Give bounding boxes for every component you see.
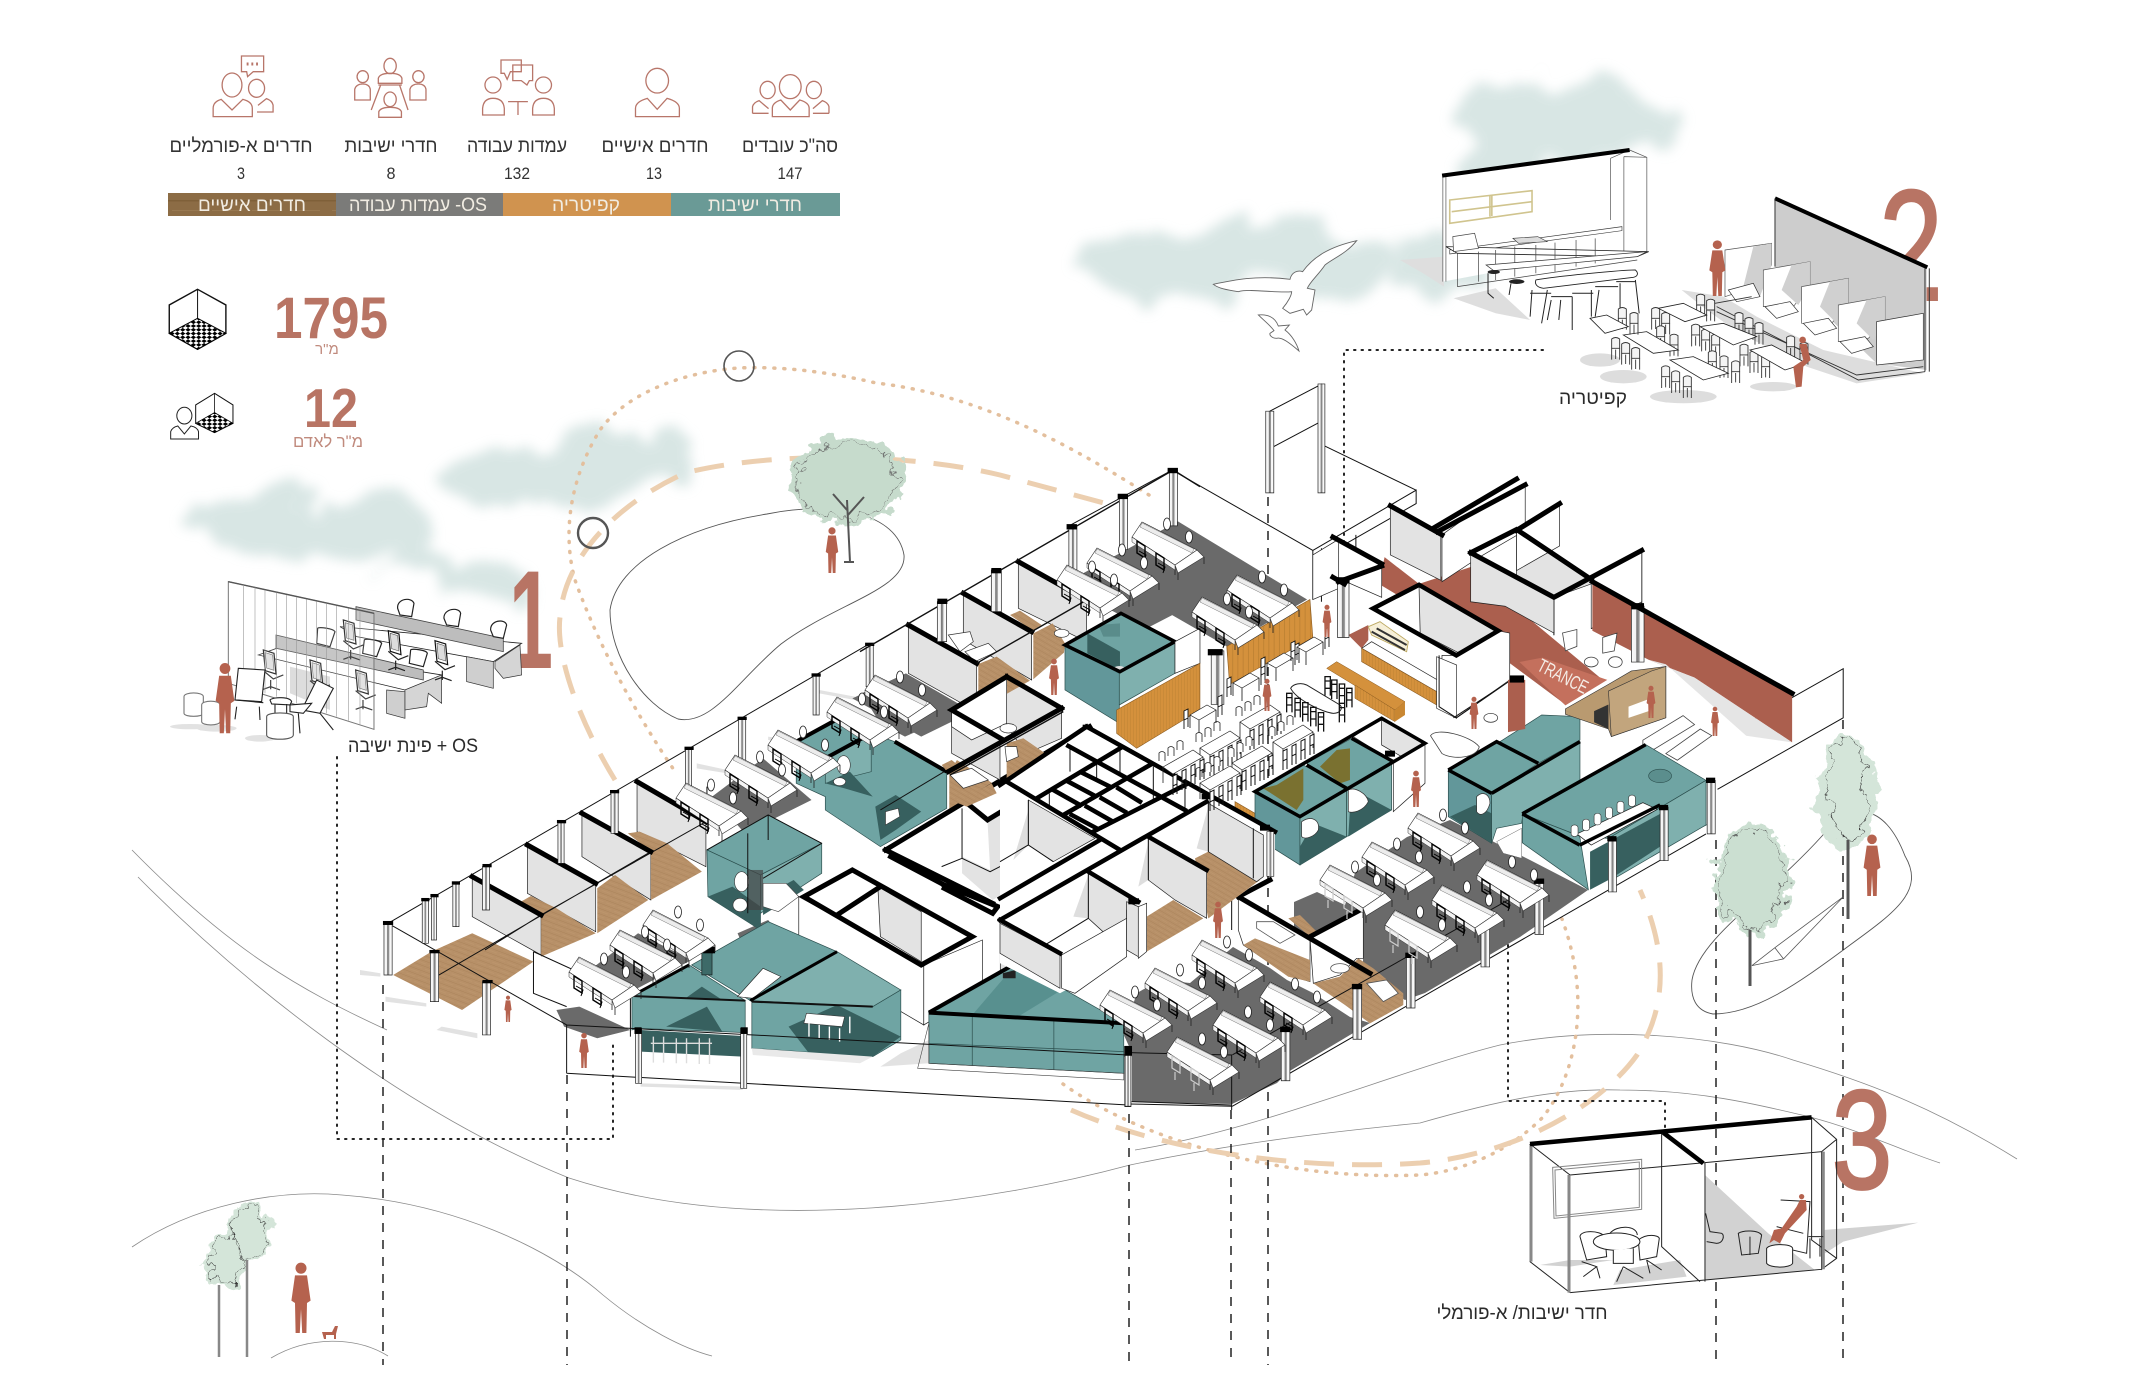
people in the plan [504,605,1719,1068]
detail view 2: kitchen part [1400,150,1649,330]
big gull [1213,241,1357,315]
ground contour lines [132,850,2017,1358]
front left meeting rooms [632,922,901,1064]
central teal booths [1255,718,1425,865]
label informal rooms: חדרים א-פורמליים [170,136,312,157]
person in park [826,527,838,573]
thin line frame [1130,897,1232,1110]
white room walls [1238,898,1363,983]
private rooms and meeting box: upper middle [860,470,1200,807]
segment: meeting rooms [671,193,840,216]
facade post caps [937,568,1001,604]
column caps [383,643,1131,1057]
acoustic orange wall [1117,663,1200,748]
segment: cafeteria [503,193,671,216]
tall tree right [1817,736,1877,919]
office chairs [263,620,455,710]
core column caps [1083,725,1270,904]
statistics labels [170,136,838,183]
round table and chairs [1580,1227,1662,1282]
icon: employees group [753,75,829,117]
area icon: room with checker floor [169,289,226,349]
wood floors private rooms [393,760,993,1010]
label total employees: סה"כ עובדים [742,136,838,157]
core wood floors [1147,852,1260,952]
facade columns [384,645,1131,1107]
icon: workstation [483,60,554,115]
upper room walls [1313,483,1642,633]
core front white walls [1062,918,1127,993]
white return wall [1175,628,1200,673]
lower right rooms [1130,880,1403,1110]
detail view 1: open space [170,582,522,742]
stat: area unit: מ"ר [315,341,339,358]
landscape blob: right garden [1692,812,1912,1014]
core thin verticals [1000,748,1253,945]
label private rooms count: חדרים אישיים [602,136,708,157]
seated person [1769,1194,1807,1243]
detail number 1: 1 [509,541,553,698]
watercolor clouds [185,73,1690,607]
label cafeteria: קפיטריה [552,195,620,216]
front meeting room C [918,963,1124,1080]
label private rooms: חדרים אישיים [198,195,306,216]
desks in rooms [1257,922,1398,1002]
icon: meeting table [355,58,426,117]
main isometric plan: right part [1067,384,1844,1106]
column caps right [1067,468,1715,1056]
reception desk in wood [1565,667,1666,737]
white wall pieces [952,677,1007,740]
garden kite path [1752,896,1844,966]
detail caption 1: OS + פינת ישיבה [348,736,478,757]
high table with stools [1287,677,1352,732]
lounge seating [1430,629,1712,760]
small furniture [948,629,1069,788]
end panel [1877,313,1923,365]
teal meeting box [1065,613,1175,723]
value 3: 3 [237,164,245,183]
detail number 2: 2 [1879,158,1943,334]
central core walls [1000,725,1275,993]
maroon feature wall [1592,582,1792,742]
projection lines dashed [383,480,1843,1365]
value 147: 147 [778,164,802,183]
lounge furniture [184,668,333,739]
dark desk floor [862,675,975,737]
landscape blob: park [610,509,904,720]
orange bar counter [1327,662,1405,722]
thick room partitions [472,782,706,915]
right facade thin lines [1129,834,1706,1106]
facade posts [937,570,1001,642]
stat: per person unit: מ"ר לאדם [293,432,363,451]
thin roof lines [860,470,1200,775]
core grey wall faces [1000,800,1263,988]
workstation desk clusters [569,518,1549,1095]
booth 2 [1763,262,1810,318]
main isometric plan: left part [360,643,1131,1107]
soft shadows [360,690,929,1090]
booth 3 [1802,278,1848,335]
thick roof lines [1530,1117,1812,1163]
value 132: 132 [504,164,530,183]
area per person icon [171,393,233,439]
kitchen room block [1373,585,1510,718]
core thick walls [1000,727,1275,953]
icon: single person [635,68,679,117]
label workstations: עמדות עבודה [467,136,567,157]
upper shell thin outlines [1069,384,1843,789]
floor shadows [1540,1175,1918,1285]
meeting booths, counter and kitchen [1235,622,1580,865]
facade columns right [1069,384,1715,1106]
thick walls [1238,880,1370,973]
birds [1213,241,1357,351]
cafeteria tables with chairs [1590,294,1808,398]
glass partition [228,582,374,729]
acoustic orange walls [1227,600,1313,684]
segment: open space [336,193,503,216]
stat: area per person: 12 [304,377,358,439]
thick walls [908,562,1087,772]
shelf unit [1450,191,1532,223]
trees bottom left [206,1203,271,1357]
route node circle left [578,518,608,548]
core column [1127,902,1147,958]
platform edge [1715,297,1925,380]
maroon column [1508,680,1525,732]
entrance mat [1508,658,1607,732]
label meeting rooms: חדרי ישיבות [708,195,802,216]
seated person [1793,337,1811,387]
dark desk floors [556,673,972,1038]
standing person [1709,240,1725,296]
label meeting rooms count: חדרי ישיבות [344,136,438,157]
floor shadows [170,724,275,742]
wall screen [1553,1159,1642,1218]
cafeteria tables [1159,627,1329,811]
lounge set [1706,1200,1823,1267]
boardroom right [1522,745,1707,890]
booth 1 [1725,243,1772,302]
grey wall faces private rooms [472,677,1062,955]
front desk row [258,628,442,718]
stat: total area: 1795 [274,286,388,351]
person silhouette [216,663,234,733]
entry maroon floor [1379,557,1603,704]
room frame [1530,1117,1837,1293]
entrance sign: TRANCE [1534,655,1591,699]
wood floors [1243,915,1403,1023]
kitchen front [1348,622,1457,718]
grey walls [908,562,1087,780]
person by tall tree [1864,834,1880,896]
value 13: 13 [646,164,662,183]
detail number 3: 3 [1832,1061,1892,1218]
dotted circulation orbit [569,368,1578,1176]
upper office floor [1072,521,1307,646]
detail caption 2: קפיטריה [1559,388,1627,409]
central core walls west [804,727,1097,965]
room wood floor repeat [1243,938,1310,982]
lobby floor shade [1649,660,1792,742]
white rooms near core [799,887,1059,1025]
wood floors [942,611,1065,807]
open office lower right: dark carpet [1123,820,1588,1104]
tree in park [789,436,905,562]
thick roofline walls upper right [1333,479,1792,693]
bar table [1486,252,1647,330]
dashed circulation orbit [559,457,1660,1165]
small gull [1258,315,1299,351]
kitchen back wall [1442,150,1649,287]
route node circle top [724,351,754,381]
small orange panel [1235,802,1255,824]
detail view 3: informal meeting [1530,1117,1918,1293]
projection lines dotted to detail views [337,350,1665,1139]
segment: private rooms [168,193,336,216]
core wedges of shade [1013,807,1208,951]
meeting room A [707,815,822,930]
detail caption 3: חדר ישיבות/ א-פורמלי [1436,1303,1608,1324]
legend bar: rooms and areas [168,193,840,216]
booth 4 [1838,297,1885,353]
label open space: OS- עמדות עבודה [349,195,487,216]
back desk row [340,599,522,688]
icon: informal talk [213,56,273,117]
floor shadows [1580,290,1923,403]
teal room right of cafeteria [1448,715,1580,858]
facade outline thin lines [388,643,1128,1105]
partition wall [1775,198,1929,372]
person with dog [291,1263,338,1339]
detail view 2: seating [1580,198,1929,403]
value 8: 8 [386,164,396,183]
core white base [1000,727,1275,993]
plan base: entry floor and kitchen [1072,521,1603,718]
statistics icons [213,56,829,117]
shadows [1400,257,1530,320]
broad tree right [1714,823,1790,986]
meeting room B [796,716,947,847]
